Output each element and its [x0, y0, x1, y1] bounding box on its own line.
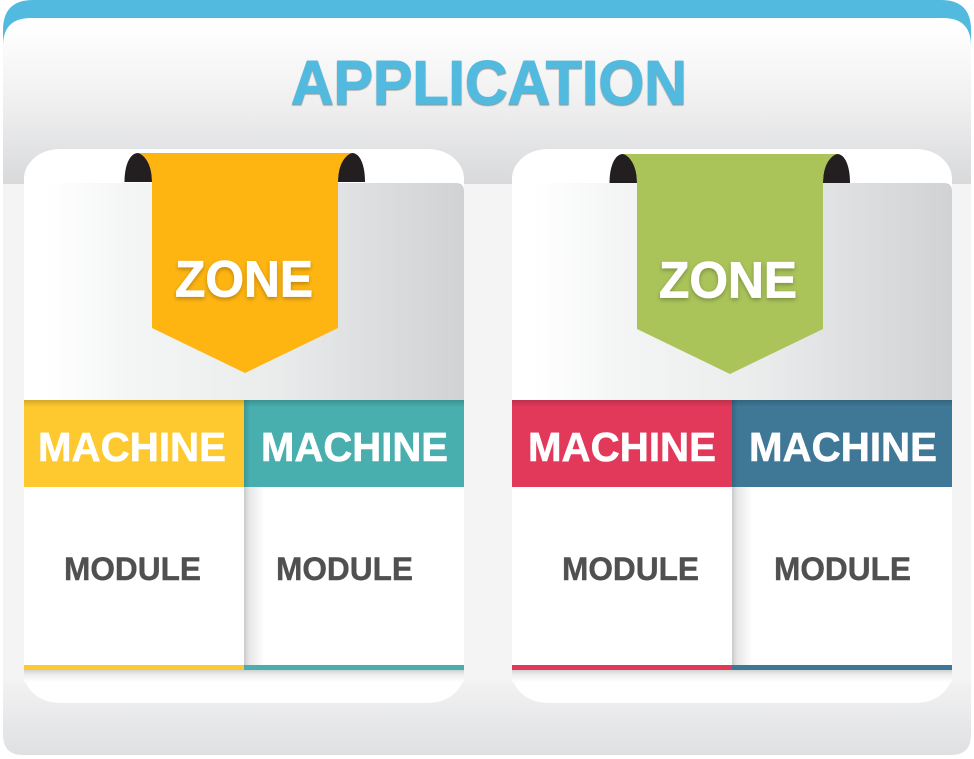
module label right: MODULE	[774, 551, 911, 587]
title: APPLICATION	[291, 49, 687, 118]
ribbon	[623, 154, 837, 374]
bottom strips	[512, 665, 952, 682]
icon: right ribbon fold	[823, 154, 850, 183]
zone backdrop	[24, 183, 464, 400]
module label left: MODULE	[562, 551, 699, 587]
panel: left zone card	[24, 149, 464, 703]
panel: right zone card	[512, 149, 952, 703]
module column shadow	[244, 487, 264, 665]
card background	[512, 149, 952, 703]
module column shadow	[732, 487, 752, 665]
machine header: blue	[732, 400, 952, 487]
bottom strips	[24, 665, 464, 682]
card background	[24, 149, 464, 703]
module label left: MODULE	[64, 551, 201, 587]
machine header: red: MACHINE	[528, 424, 716, 470]
icon: left ribbon fold	[610, 154, 637, 183]
machine header: yellow	[24, 400, 244, 487]
ribbon	[138, 153, 352, 373]
icon: left ribbon fold	[124, 153, 152, 182]
zone backdrop	[512, 183, 952, 400]
machine header: blue: MACHINE	[749, 424, 937, 470]
icon: right ribbon fold	[338, 153, 365, 182]
module label right: MODULE	[276, 551, 413, 587]
zone label: ZONE	[175, 250, 313, 308]
machine header: red	[512, 400, 732, 487]
zone label: ZONE	[659, 252, 797, 308]
machine header: teal	[244, 400, 464, 487]
machine header: teal: MACHINE	[261, 424, 448, 470]
machine header: yellow: MACHINE	[38, 424, 226, 470]
